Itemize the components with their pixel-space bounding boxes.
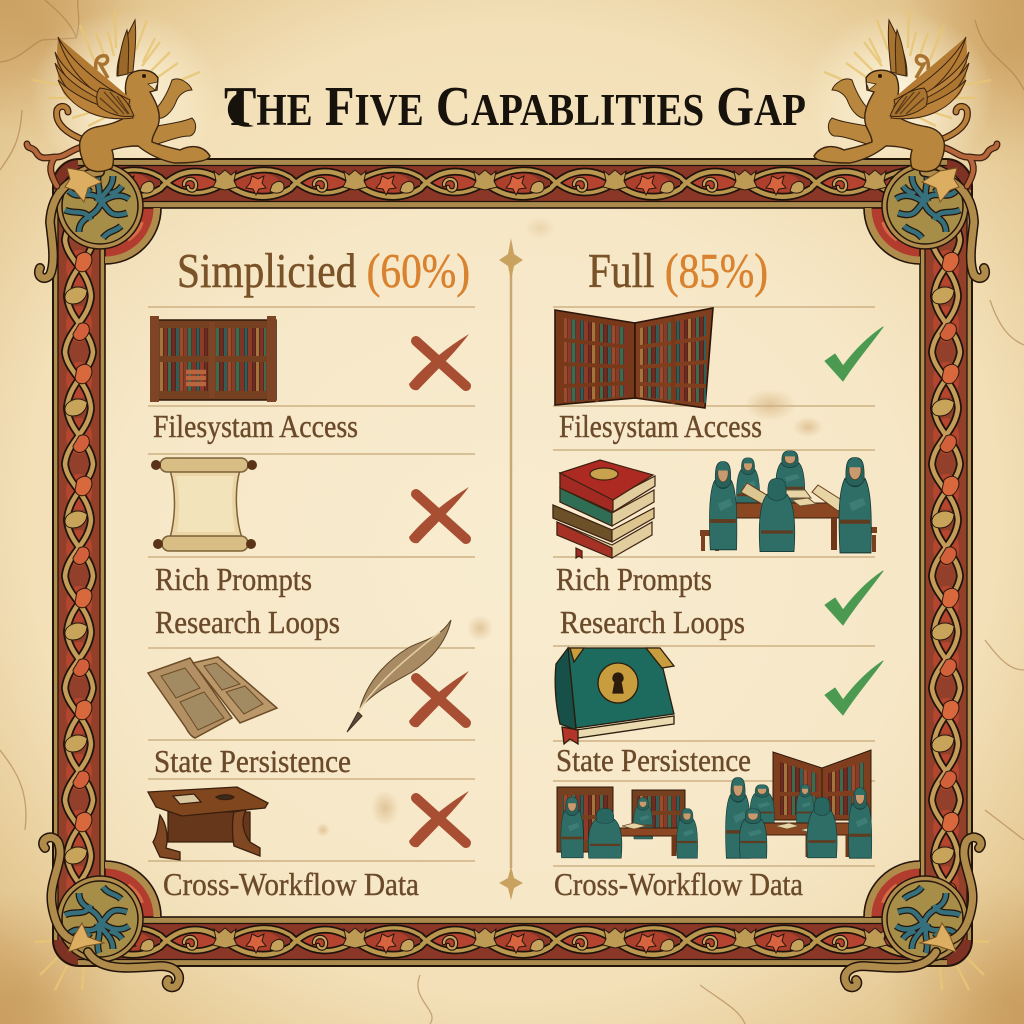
icon: locked green book [555, 648, 674, 744]
heading: full: Full (85%) [588, 243, 768, 298]
right column labels: Filesystam Access [559, 408, 762, 444]
icon: monks at table (rich prompts) [700, 451, 877, 553]
illuminated border frame [53, 159, 972, 966]
right column labels: Rich Prompts [556, 561, 712, 597]
row dividers [148, 307, 875, 866]
right column labels: Research Loops [560, 604, 745, 640]
icon: tick 1 [825, 327, 883, 381]
icon: cross 3 [409, 671, 469, 727]
left column labels: Cross-Workflow Data [163, 866, 419, 902]
center divider [499, 238, 523, 900]
right column labels: Cross-Workflow Data [554, 866, 803, 902]
icon: bookshelf [150, 316, 276, 402]
griffin right [814, 20, 997, 186]
icon: monks in library [557, 750, 872, 858]
icon: cross 4 [409, 791, 469, 847]
icon: wax tablets [148, 657, 277, 738]
left column labels: Rich Prompts [155, 561, 312, 597]
icon: cross 1 [409, 334, 469, 390]
icon: quill [347, 620, 451, 732]
icon: tick 2 [825, 571, 883, 625]
right column labels: State Persistence [556, 742, 751, 778]
icon: writing desk [148, 787, 268, 860]
heading: simplified: Simplicied (60%) [177, 243, 470, 298]
icon: tick 3 [825, 661, 883, 715]
icon: open corner bookcase [555, 308, 713, 408]
icon: stacked books [553, 460, 655, 558]
corner scroll flourishes [39, 172, 985, 987]
corner roundels [57, 163, 968, 962]
left column labels: State Persistence [154, 743, 351, 779]
title: THE FIVE CAPABLITIES GAP [224, 76, 806, 138]
left column labels [153, 408, 419, 902]
stains inside panel [316, 216, 823, 837]
griffin left [27, 20, 210, 186]
left column labels: Research Loops [155, 604, 340, 640]
gold corner stars [65, 168, 959, 952]
left column labels: Filesystam Access [153, 408, 358, 444]
icon: cross 2 [409, 487, 469, 543]
icon: scroll [151, 458, 257, 551]
right column labels [554, 408, 803, 902]
